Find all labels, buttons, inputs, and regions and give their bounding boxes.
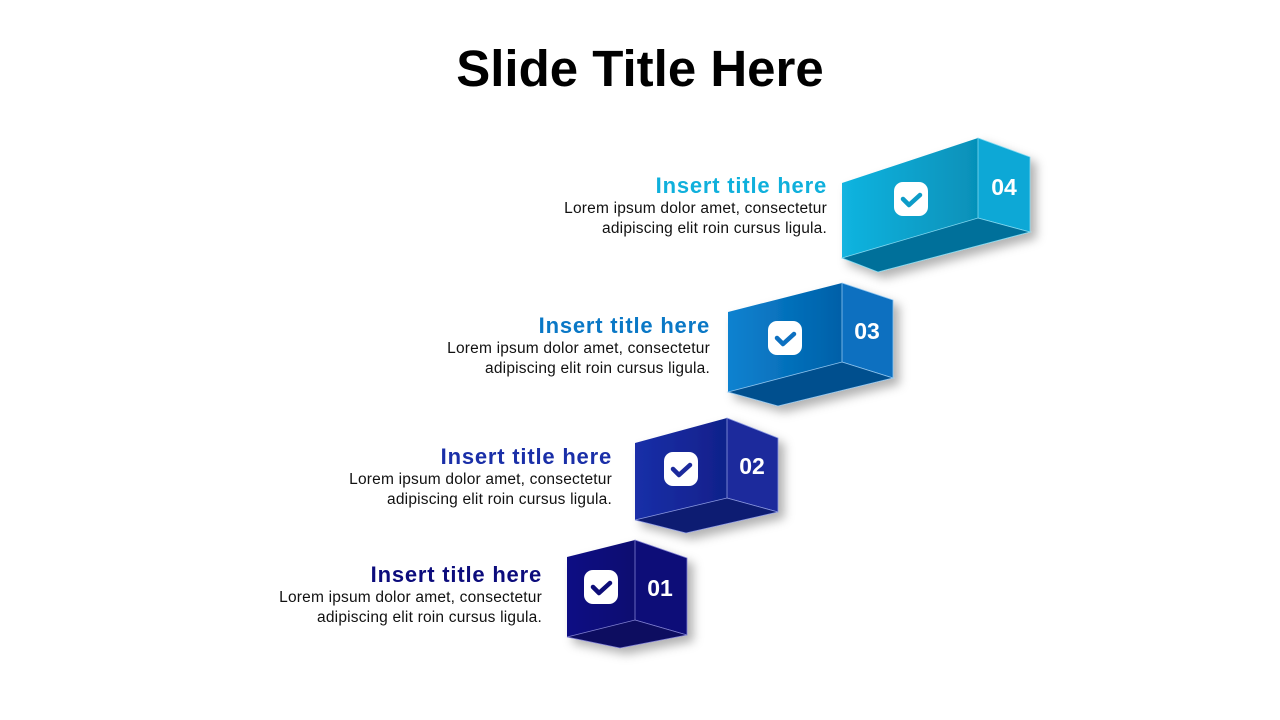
icon: check 01 <box>584 570 618 604</box>
title: Slide Title Here <box>456 40 824 97</box>
box 01 <box>567 540 687 648</box>
text: step 01: adipiscing elit roin cursus ligula. <box>317 608 542 626</box>
number 04: 04 <box>991 174 1017 200</box>
icon: check 04 <box>894 182 928 216</box>
text: step 02: Lorem ipsum dolor amet, consectetur <box>349 471 612 488</box>
number 02: 02 <box>739 453 765 479</box>
text: step 03: adipiscing elit roin cursus ligula. <box>485 360 710 376</box>
box 02 <box>635 418 778 533</box>
text: step 02: Insert title here <box>441 444 612 469</box>
icon: check 03 <box>768 321 802 355</box>
box 03 <box>728 283 893 406</box>
text: step 03: Insert title here <box>539 313 710 338</box>
text: step 04: Insert title here <box>656 173 827 198</box>
text: step 02 <box>349 444 612 508</box>
text: step 02: adipiscing elit roin cursus ligula. <box>387 490 612 508</box>
icon: check 02 <box>664 452 698 486</box>
text: step 01: Lorem ipsum dolor amet, consectetur <box>279 589 542 606</box>
number 03: 03 <box>854 318 880 344</box>
text: step 04: Lorem ipsum dolor amet, consectetur <box>564 200 827 217</box>
number 01: 01 <box>647 575 673 601</box>
text: step 03 <box>447 313 710 376</box>
text: step 04: adipiscing elit roin cursus ligula. <box>602 220 827 236</box>
text: step 01 <box>279 562 542 626</box>
text: step 03: Lorem ipsum dolor amet, consectetur <box>447 340 710 357</box>
text: step 04 <box>564 173 827 236</box>
box 04 <box>842 138 1030 272</box>
text: step 01: Insert title here <box>371 562 542 587</box>
